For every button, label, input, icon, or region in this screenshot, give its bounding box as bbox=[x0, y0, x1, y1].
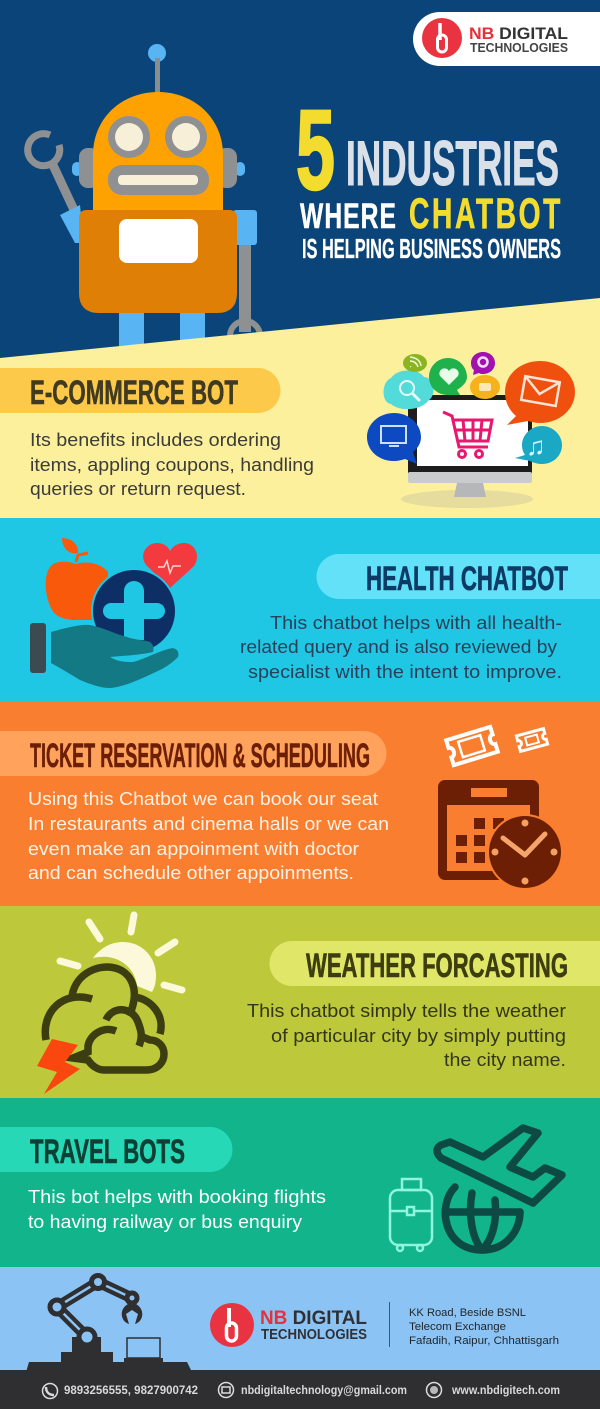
panel: footer bbox=[0, 1267, 600, 1409]
contact: email bbox=[218, 1382, 407, 1398]
heading: travel bots: TRAVEL BOTS bbox=[30, 1133, 185, 1171]
panel: e-commerce bot bbox=[0, 298, 600, 518]
icon: plane and globe bbox=[437, 1128, 562, 1250]
contact: phone: 9893256555, 9827900742 bbox=[64, 1385, 198, 1397]
text: weather description: of particular city by simply putting bbox=[271, 1025, 566, 1046]
logo: top right bbox=[413, 12, 600, 66]
icon: hand with apple, heart and medical cross bbox=[30, 538, 197, 688]
text: health description: This chatbot helps with all health- bbox=[270, 612, 562, 633]
heading: travel bots bbox=[0, 1127, 233, 1172]
logo: top right: TECHNOLOGIES bbox=[470, 40, 568, 55]
icon: calendar and clock bbox=[438, 780, 563, 890]
text: travel description: This bot helps with booking flights bbox=[28, 1186, 326, 1207]
contact: website bbox=[426, 1382, 560, 1398]
icon: robotic arm and laptop bbox=[26, 1276, 192, 1372]
text: health description: specialist with the intent to improve. bbox=[248, 661, 562, 682]
contact: email: nbdigitaltechnology@gmail.com bbox=[241, 1385, 407, 1397]
icon: tickets bbox=[446, 727, 548, 765]
text: ticket description: and can schedule other appoinments. bbox=[28, 862, 354, 883]
heading: e-commerce bot bbox=[0, 368, 280, 413]
panel: health chatbot bbox=[0, 518, 600, 702]
contact bar bbox=[0, 1370, 600, 1409]
logo: top right: NB DIGITAL bbox=[469, 24, 568, 43]
logo: footer: NB DIGITAL bbox=[260, 1308, 367, 1329]
text: address: KK Road, Beside BSNL bbox=[409, 1307, 526, 1319]
text: e-commerce description bbox=[30, 429, 314, 499]
panel: weather forcasting bbox=[0, 906, 600, 1098]
text: ticket description: Using this Chatbot we can book our seat bbox=[28, 788, 378, 809]
contact: phone bbox=[42, 1384, 198, 1398]
logo: footer bbox=[210, 1302, 390, 1347]
heading: health chatbot bbox=[316, 554, 600, 599]
text: e-commerce description: Its benefits includes ordering bbox=[30, 429, 281, 450]
text: e-commerce description: items, appling coupons, handling bbox=[30, 454, 314, 475]
text: travel description bbox=[28, 1186, 326, 1232]
text: weather description: the city name. bbox=[444, 1049, 566, 1070]
panel: ticket reservation and scheduling bbox=[0, 702, 600, 906]
text: health description: related query and is also reviewed by bbox=[240, 636, 558, 657]
heading: ticket reservation and scheduling bbox=[0, 731, 386, 776]
text: e-commerce description: queries or return request. bbox=[30, 478, 246, 499]
icon: sun, clouds and lightning bbox=[37, 915, 182, 1094]
text: travel description: to having railway or bus enquiry bbox=[28, 1211, 303, 1232]
text: health description bbox=[240, 612, 562, 682]
text: address: Telecom Exchange bbox=[409, 1321, 506, 1333]
icon: robot bbox=[28, 44, 260, 351]
text: address bbox=[409, 1307, 559, 1347]
text: ticket description: even make an appoinment with doctor bbox=[28, 838, 359, 859]
text: ticket description: In restaurants and cinema halls or we can bbox=[28, 813, 389, 834]
contact: website: www.nbdigitech.com bbox=[451, 1385, 560, 1397]
icon: computer with cart and chat bubbles: ♫ bbox=[526, 431, 546, 461]
panel: travel bots bbox=[0, 1098, 600, 1267]
text: weather description: This chatbot simply tells the weather bbox=[247, 1000, 566, 1021]
title: WHERE bbox=[300, 197, 397, 236]
heading: e-commerce bot: E-COMMERCE BOT bbox=[30, 374, 238, 412]
text: address: Fafadih, Raipur, Chhattisgarh bbox=[409, 1335, 559, 1347]
icon: suitcase bbox=[390, 1179, 432, 1251]
panel: header bbox=[0, 0, 600, 360]
text: ticket description bbox=[28, 788, 389, 883]
icon: computer with cart and chat bubbles bbox=[367, 352, 575, 508]
logo: footer: TECHNOLOGIES bbox=[261, 1327, 367, 1343]
text: weather description bbox=[247, 1000, 566, 1070]
title: 5 bbox=[296, 87, 335, 213]
title bbox=[296, 87, 563, 264]
